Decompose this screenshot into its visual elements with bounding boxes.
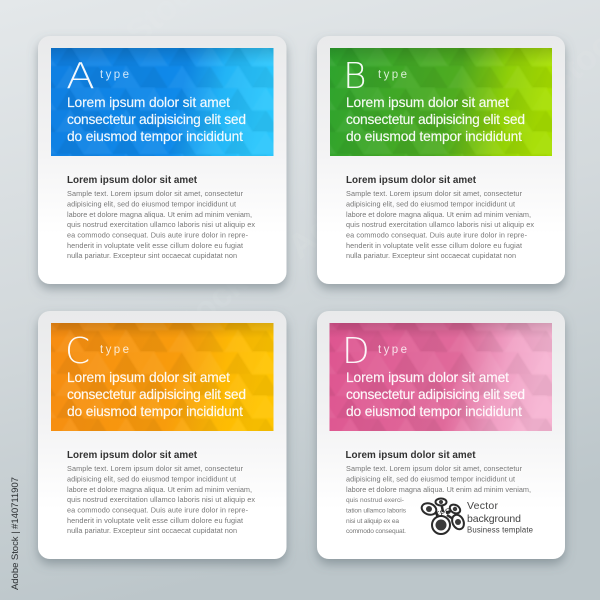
body text C: henderit in voluptate velit esse cillum dolore eu fugiat [67, 516, 243, 525]
headline A: consectetur adipisicing elit sed [67, 112, 246, 127]
body text B: adipisicing elit, sed do eiusmod tempor incididunt ut [346, 200, 515, 208]
body text C: adipisicing elit, sed do eiusmod tempor incididunt ut [67, 474, 236, 484]
watermark: Adobe Stock [371, 363, 554, 526]
headline B: Lorem ipsum dolor sit amet [346, 95, 509, 110]
body text D: Sample text. Lorem ipsum dolor sit amet, consectetur [346, 464, 523, 473]
body text A: labore et dolore magna aliqua. Ut enim ad minim veniam, [67, 210, 252, 219]
logo caption: background [467, 513, 521, 525]
body text D: tation ullamco laboris [346, 508, 407, 514]
body text B: nulla pariatur. Excepteur sint occaecat cupidatat non [346, 251, 516, 260]
colour panel B [330, 48, 552, 156]
headline C: Lorem ipsum dolor sit amet [67, 370, 230, 385]
headline C: consectetur adipisicing elit sed [67, 387, 246, 402]
body text A: Sample text. Lorem ipsum dolor sit amet, consectetur [67, 189, 244, 198]
body text A [67, 189, 255, 260]
colour panel A [51, 48, 274, 156]
body text B: ea commodo consequat. Duis aute irure dolor in repre- [346, 230, 528, 240]
body text D [346, 464, 531, 535]
body text D: adipisicing elit, sed do eiusmod tempor incididunt ut [346, 474, 515, 484]
card C [38, 311, 286, 559]
type label A: type [100, 69, 129, 81]
card B [317, 36, 565, 284]
subheading A: Lorem ipsum dolor sit amet [67, 175, 198, 186]
type label B: type [378, 69, 407, 81]
icon: EPS logo: EPS [434, 506, 452, 520]
headline B: consectetur adipisicing elit sed [346, 112, 525, 127]
watermark: Adobe Stock [71, 263, 254, 426]
headline D: do eiusmod tempor incididunt [346, 404, 522, 419]
colour panel D [330, 323, 552, 431]
body text A: adipisicing elit, sed do eiusmod tempor incididunt ut [67, 200, 236, 208]
body text B [346, 189, 534, 260]
body text A: nulla pariatur. Excepteur sint occaecat cupidatat non [67, 251, 237, 260]
letter B: B [343, 56, 367, 97]
body text D: nisi ut aliquip ex ea [346, 518, 399, 525]
body text A: quis nostrud exercitation ullamco laboris nisi ut aliquip ex [67, 220, 255, 229]
type label D: type [378, 344, 407, 356]
type label C: type [100, 344, 129, 356]
headline D: Lorem ipsum dolor sit amet [346, 370, 509, 385]
body text C [67, 464, 255, 535]
body text C: quis nostrud exercitation ullamco laboris nisi ut aliquip ex [67, 495, 255, 504]
headline A [67, 95, 246, 144]
logo caption: Vector [467, 500, 498, 512]
body text B: henderit in voluptate velit esse cillum dolore eu fugiat [346, 241, 522, 250]
body text C: ea commodo consequat. Duis aute irure dolor in repre- [67, 506, 249, 514]
body text C: labore et dolore magna aliqua. Ut enim ad minim veniam, [67, 485, 252, 494]
body text C: Sample text. Lorem ipsum dolor sit amet, consectetur [67, 464, 244, 473]
colour panel C [51, 323, 274, 431]
logo caption: Business template [467, 526, 533, 534]
headline C: do eiusmod tempor incididunt [67, 404, 243, 419]
headline A: do eiusmod tempor incididunt [67, 129, 243, 144]
headline D: consectetur adipisicing elit sed [346, 387, 525, 402]
subheading C: Lorem ipsum dolor sit amet [67, 450, 198, 461]
logo caption [467, 500, 533, 534]
headline D [346, 370, 525, 419]
body text A: ea commodo consequat. Duis aute irure dolor in repre- [67, 230, 249, 240]
card D [317, 311, 565, 559]
subheading D: Lorem ipsum dolor sit amet [346, 450, 476, 461]
card A [38, 36, 286, 284]
body text D: labore et dolore magna aliqua. Ut enim ad minim veniam, [346, 485, 531, 494]
body text B: quis nostrud exercitation ullamco laboris nisi ut aliquip ex [346, 220, 534, 229]
body text A: henderit in voluptate velit esse cillum dolore eu fugiat [67, 241, 243, 250]
body text B: Sample text. Lorem ipsum dolor sit amet, consectetur [346, 189, 523, 198]
watermark: Adobe Stock [281, 103, 464, 266]
body text B: labore et dolore magna aliqua. Ut enim ad minim veniam, [346, 210, 531, 219]
credit text: Adobe Stock | #140711907 [10, 477, 21, 590]
icon: EPS logo [420, 498, 466, 534]
letter D: D [342, 331, 370, 372]
body text C: nulla pariatur. Excepteur sint occaecat cupidatat non [67, 526, 237, 535]
headline B [346, 95, 525, 144]
body text D: commodo consequat. [346, 528, 406, 535]
letter A: A [66, 56, 95, 97]
headline C [67, 370, 246, 419]
subheading B: Lorem ipsum dolor sit amet [346, 175, 477, 186]
headline A: Lorem ipsum dolor sit amet [67, 95, 230, 110]
headline B: do eiusmod tempor incididunt [346, 129, 522, 144]
body text D: quis nostrud exerci- [346, 497, 404, 504]
letter C: C [65, 331, 90, 372]
